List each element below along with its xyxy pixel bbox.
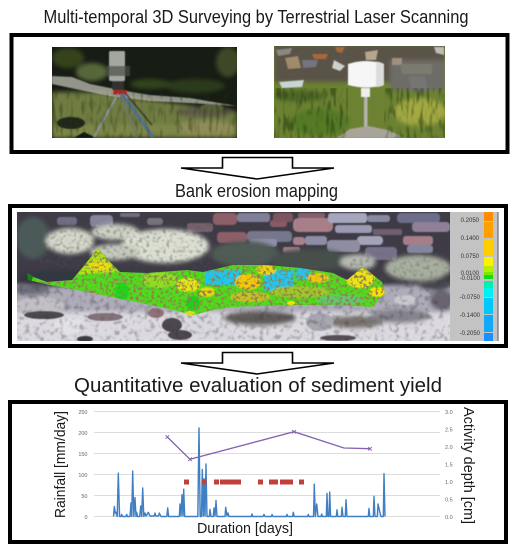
chart gridlines — [94, 412, 440, 516]
stone wall — [57, 213, 450, 260]
legend labels: 0.0100 — [461, 271, 480, 277]
rocks — [16, 295, 416, 342]
right axis tick labels: 0.0 — [445, 515, 453, 521]
right axis tick labels: 0.5 — [445, 498, 453, 504]
legend colour bar — [484, 212, 493, 341]
right axis tick labels: 1.0 — [445, 480, 453, 486]
right axis tick labels: 2.0 — [445, 445, 453, 451]
legend labels: 0.1400 — [461, 236, 480, 242]
photo: laser scanner on tripod — [52, 47, 240, 138]
left axis tick labels: 200 — [78, 431, 88, 437]
right axis tick labels: 1.5 — [445, 462, 453, 468]
left axis tick labels: 100 — [78, 473, 88, 479]
photo: reflective target on pole — [274, 44, 446, 138]
left axis tick labels: 250 — [78, 410, 88, 416]
title: Multi-temporal 3D Surveying by Terrestrial Laser Scanning — [44, 7, 468, 27]
left axis tick labels: 50 — [81, 494, 88, 500]
erosion depth colour overlay — [25, 245, 390, 317]
legend labels: 0.2050 — [461, 218, 480, 224]
left axis title: Rainfall [mm/day] — [52, 411, 69, 518]
arrow: down to quantitative evaluation — [181, 352, 334, 374]
legend labels — [460, 218, 481, 337]
rainfall series — [114, 428, 385, 516]
left axis tick labels: 0 — [84, 515, 88, 521]
right axis tick labels: 3.0 — [445, 410, 453, 416]
right axis title: Activity depth [cm] — [460, 407, 477, 524]
left axis tick labels — [78, 410, 88, 521]
legend labels: -0.1400 — [460, 313, 481, 319]
heading: bank erosion mapping: Bank erosion mapping — [175, 181, 338, 201]
right axis tick labels: 2.5 — [445, 428, 453, 434]
heading: quantitative evaluation of sediment yield: Quantitative evaluation of sediment yield — [74, 375, 442, 397]
left axis tick labels: 150 — [78, 452, 88, 458]
panel: rainfall and activity depth chart — [10, 402, 506, 542]
legend labels: -0.0750 — [460, 295, 481, 301]
vegetation — [10, 217, 454, 328]
legend labels: -0.0100 — [460, 276, 481, 282]
legend labels: -0.2050 — [460, 331, 481, 337]
activity depth line — [166, 430, 372, 461]
legend: colour scale — [450, 212, 499, 341]
panel: bank erosion map — [10, 206, 506, 346]
arrow: down to bank erosion mapping — [181, 158, 334, 179]
panel: terrestrial laser scanning photos — [12, 35, 508, 152]
right axis tick labels — [445, 410, 453, 521]
ground base — [17, 282, 450, 315]
legend labels: 0.0750 — [461, 254, 480, 260]
x axis title: Duration [days] — [197, 520, 293, 537]
photo: stone wall and river bank — [10, 212, 455, 346]
activity markers — [184, 480, 304, 484]
